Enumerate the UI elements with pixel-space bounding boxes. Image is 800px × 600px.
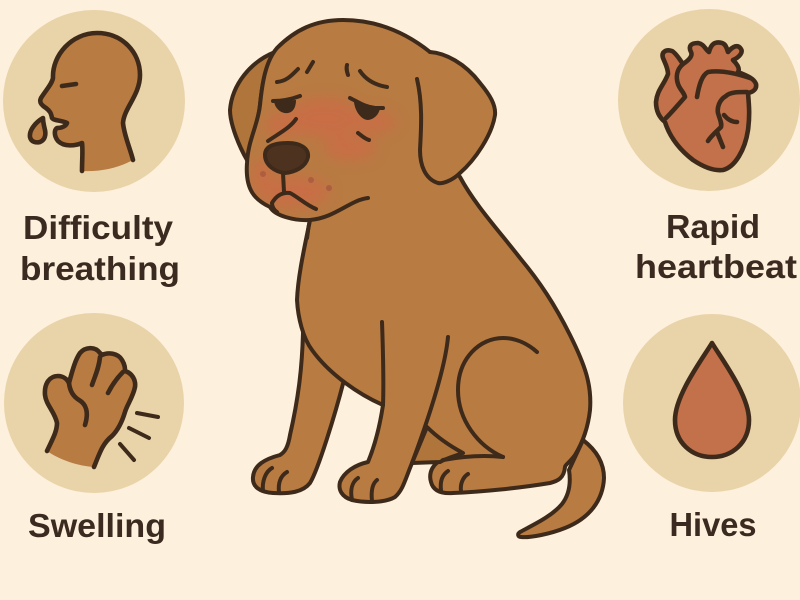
label: Rapid heartbeat — [635, 208, 797, 285]
dog body — [297, 140, 590, 502]
dog head — [247, 20, 440, 220]
dog far front leg — [253, 333, 344, 493]
dog haunch — [458, 338, 537, 457]
dog tail — [518, 440, 604, 537]
icon circle: heart — [618, 9, 800, 191]
dog near front leg — [382, 322, 383, 405]
label: Difficulty breathing: Difficulty — [23, 209, 174, 246]
rash spots — [260, 171, 332, 191]
illustration: sad dog with allergic reaction — [230, 20, 604, 537]
dog eyes — [273, 96, 383, 120]
dog belly shadow — [412, 427, 463, 463]
label: Difficulty breathing — [20, 209, 180, 287]
label: Rapid heartbeat: Rapid — [666, 208, 760, 245]
panel: swelling — [4, 313, 184, 544]
facial redness rash — [252, 98, 396, 208]
dog muzzle creases — [268, 119, 369, 141]
dog eyebrows — [277, 62, 387, 87]
dog nose — [265, 143, 308, 173]
icon circle: swelling — [4, 313, 184, 493]
icon circle: breathing — [3, 10, 185, 192]
icon: anatomical heart — [656, 42, 756, 170]
dog right ear — [417, 52, 495, 183]
icon: head in profile with droplet — [30, 33, 140, 171]
label: Rapid heartbeat: heartbeat — [635, 248, 797, 285]
panel: rapid heartbeat — [618, 9, 800, 285]
icon: drop — [675, 343, 749, 457]
panel: difficulty breathing — [3, 10, 185, 287]
dog left ear — [230, 52, 275, 160]
icon: swollen paw hand — [45, 348, 158, 467]
label: Hives: Hives — [670, 506, 756, 543]
icon circle: hives — [623, 314, 800, 492]
label: Swelling: Swelling — [28, 507, 166, 544]
panel: hives — [623, 314, 800, 543]
label: Difficulty breathing: breathing — [20, 250, 180, 287]
dog mouth — [272, 173, 316, 212]
dog paw toes — [263, 468, 468, 501]
